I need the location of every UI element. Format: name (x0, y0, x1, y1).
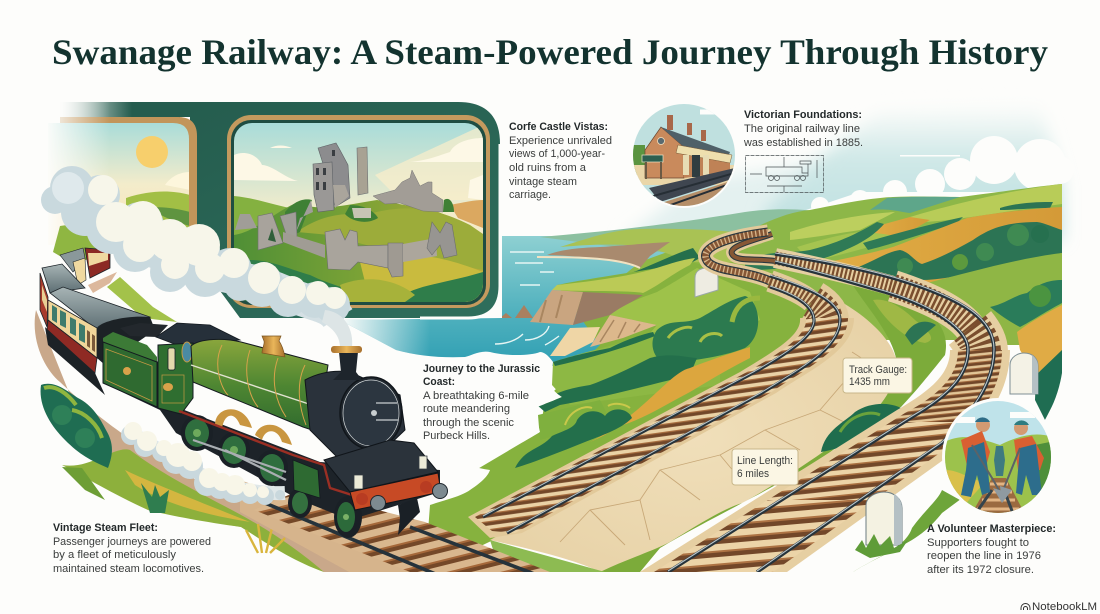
left arch (258, 213, 283, 250)
tender (103, 323, 168, 407)
callout: Corfe Castle Vistas: vintage steam (509, 176, 577, 188)
hedges (652, 296, 758, 365)
lower steam (121, 422, 285, 505)
callout: A Volunteer Masterpiece: Supporters fought to (927, 537, 1029, 549)
front walls (325, 229, 388, 270)
title: Swanage Railway: A Steam-Powered Journey Through History (52, 32, 1048, 72)
clouds (234, 153, 298, 181)
milestone right (1010, 353, 1038, 394)
stat box: track gauge: Track Gauge: (849, 364, 907, 376)
grass tufts (141, 483, 169, 513)
front keep (313, 162, 334, 212)
steam plume (41, 166, 352, 348)
callout: Journey to the Jurassic Coast: Journey to the Jurassic (423, 363, 540, 375)
callout: Victorian Foundations: Victorian Foundations: (744, 109, 862, 121)
callout: A Volunteer Masterpiece: A Volunteer Masterpiece: (927, 523, 1056, 535)
middle carriage (42, 264, 85, 293)
track A curve (770, 281, 827, 321)
back hills (234, 196, 288, 235)
worker left (961, 417, 1006, 503)
near carriage (50, 287, 150, 330)
stat box: line length: Line Length: (737, 455, 793, 467)
callout: Corfe Castle Vistas: carriage. (509, 189, 551, 201)
callout: Victorian Foundations (743, 109, 863, 149)
castle hill (234, 200, 483, 302)
driving wheels (181, 415, 362, 538)
chimney (331, 346, 362, 380)
stat box: line length (732, 449, 798, 485)
callout: A Volunteer Masterpiece (927, 523, 1056, 576)
clouds (800, 136, 1074, 215)
distant worker (994, 446, 1005, 476)
track B near (640, 253, 1020, 572)
front platform (324, 440, 438, 492)
buffer beam (350, 473, 441, 510)
track A near (468, 274, 854, 538)
track B curve (775, 258, 981, 352)
callout: A Volunteer Masterpiece: reopen the line in 1976 (927, 550, 1041, 562)
callout: Corfe Castle Vistas: old ruins from a (509, 162, 587, 174)
brass dome (262, 336, 285, 357)
back hill (540, 209, 809, 252)
callout: Journey to the Jurassic Coast (423, 363, 540, 442)
milestone far (695, 268, 718, 297)
milestone near (855, 492, 908, 558)
station building (645, 127, 684, 178)
green slope near window (53, 225, 96, 260)
callout: Vintage Steam Fleet (53, 522, 211, 575)
worker right (1000, 420, 1044, 503)
road between tracks (490, 300, 897, 572)
panel: sky and clouds (620, 105, 1074, 240)
callout: Victorian Foundations: The original railway line (744, 123, 860, 135)
right foliage at foot (853, 490, 960, 572)
ground tan (34, 310, 349, 572)
bushes (41, 384, 112, 500)
green verge (490, 280, 946, 572)
cliffs (530, 290, 583, 325)
tower (357, 147, 368, 195)
low wall (283, 232, 325, 258)
carriages (40, 248, 155, 395)
running plate (179, 411, 352, 495)
left window (52, 102, 197, 245)
smokebox (305, 371, 405, 460)
callout: Journey to the Jurassic Coast: Purbeck Hills. (423, 430, 490, 442)
callout: Corfe Castle Vistas: Corfe Castle Vistas: (509, 121, 608, 133)
left headland (428, 258, 808, 545)
callout: Corfe Castle Vistas (509, 121, 612, 201)
sea (344, 236, 666, 366)
callout: Corfe Castle Vistas: views of 1,000-year- (509, 148, 605, 160)
cylinder (293, 460, 320, 498)
green bank (62, 449, 324, 572)
connecting rods (193, 440, 286, 480)
NotebookLM watermark: NotebookLM (1032, 601, 1097, 613)
stat box: track gauge: 1435 mm (849, 376, 890, 388)
right ruins (373, 170, 443, 212)
callout: Vintage Steam Fleet: Vintage Steam Fleet: (53, 522, 158, 534)
callout: Journey to the Jurassic Coast: through the scenic (423, 417, 515, 429)
far headland (537, 228, 743, 274)
back keep (318, 143, 350, 207)
callout: A Volunteer Masterpiece: after its 1972 closure. (927, 564, 1034, 576)
lamps (354, 456, 427, 489)
panel: landscape with hills, coast and tracks (340, 184, 1062, 575)
medallion: volunteers (940, 398, 1060, 520)
loco track (240, 482, 550, 572)
right hills (730, 184, 1062, 420)
sign (642, 155, 663, 162)
callout: Vintage Steam Fleet: Passenger journeys are powered (53, 536, 211, 548)
far track sections (705, 232, 775, 281)
callout: Journey to the Jurassic Coast: Coast: (423, 376, 455, 388)
steam locomotive (103, 323, 448, 538)
callout: Vintage Steam Fleet: maintained steam locomotives. (53, 563, 204, 575)
right window: Corfe Castle (227, 115, 490, 308)
lower frame (103, 383, 440, 520)
callout: Corfe Castle Vistas: Experience unrivaled (509, 135, 612, 147)
stat box: line length: 6 miles (737, 468, 769, 480)
train embankment and foliage (34, 225, 349, 572)
boiler (191, 339, 328, 432)
callout: Journey to the Jurassic Coast: A breathtaking 6-mile (423, 390, 529, 402)
platform and track (649, 168, 735, 202)
callout: Journey to the Jurassic Coast: route meandering (423, 403, 510, 415)
panel: carriage window frame (28, 100, 500, 318)
blueprint diagram (746, 156, 824, 192)
lower bush (515, 409, 632, 468)
medallion: Victorian station (633, 104, 735, 208)
callout: Victorian Foundations: was established in 1885. (743, 137, 863, 149)
callout: Vintage Steam Fleet: by a fleet of meticulously (53, 549, 177, 561)
yellow path (590, 347, 750, 442)
stat box: track gauge (843, 358, 912, 393)
splashers (215, 409, 252, 428)
cab (156, 323, 240, 414)
far carriage (85, 248, 110, 278)
